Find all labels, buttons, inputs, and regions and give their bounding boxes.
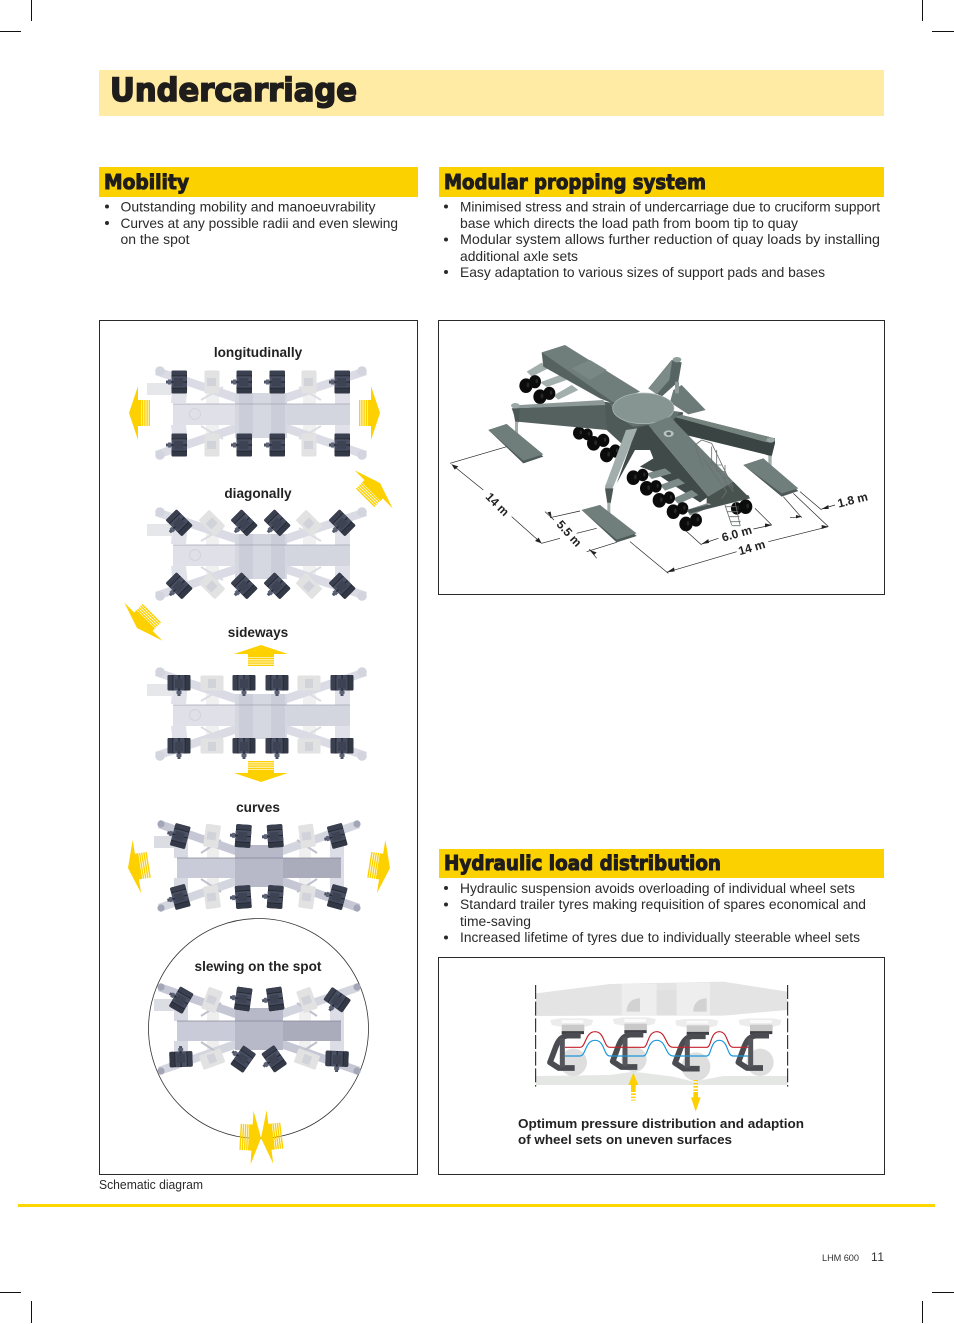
footer: page label: LHM 600 (822, 1253, 859, 1263)
chassis (536, 982, 787, 1016)
arrow: diagonal up right (346, 464, 399, 517)
text block: hydraulic bullets: Increased lifetime of tyres due to individually steerable wheel sets (460, 930, 860, 945)
arrow: diagonal down left (118, 594, 171, 647)
yellow rule (18, 1204, 935, 1207)
title: Undercarriage (110, 71, 357, 109)
text block: mobility bullets: Curves at any possible radii and even slewing (120, 216, 398, 231)
heading: diagonally: diagonally (224, 486, 292, 501)
arrow: slewing left pointing (258, 1109, 285, 1165)
heading: sideways: sideways (228, 625, 288, 640)
arrow: sideways up (234, 645, 288, 666)
diagram: sideways steering (147, 667, 367, 761)
panel: mobility heading (99, 167, 418, 197)
panel: propping system render (438, 320, 884, 594)
ladder (695, 440, 741, 526)
caption: pressure distribution (518, 1116, 804, 1147)
arrow: longitudinal right (359, 386, 380, 440)
front beam (687, 495, 750, 513)
rear right pad (670, 385, 706, 414)
caption: pressure distribution: Optimum pressure distribution and adaption (518, 1116, 804, 1131)
dimension labels: 1.8 m (836, 489, 869, 510)
text block: hydraulic bullets: Hydraulic suspension avoids overloading of individual wheel sets (460, 881, 855, 896)
heading: longitudinally: longitudinally (214, 345, 303, 360)
left arm (512, 404, 607, 430)
arrow: slewing right pointing (239, 1110, 262, 1165)
underside of front beam (611, 425, 708, 502)
suspension units (550, 1017, 782, 1069)
arrow: up (628, 1073, 638, 1101)
dimension labels: 6.0 m (720, 523, 753, 545)
text block: hydraulic bullets (444, 881, 866, 945)
illustration: hydraulic suspension (536, 982, 788, 1112)
text block: hydraulic bullets: time-saving (460, 914, 531, 929)
diagram: slewing steering (154, 983, 361, 1076)
dimension labels: 5.5 m (554, 517, 585, 550)
arrow: down (691, 1080, 701, 1112)
arrow: sideways down (234, 761, 288, 782)
caption: schematic diagram: Schematic diagram (99, 1177, 203, 1192)
wheels (560, 1047, 774, 1081)
footer: page label: 11 (871, 1250, 884, 1264)
slewing plate (610, 403, 680, 427)
diagram: longitudinal steering (147, 366, 367, 460)
footer: page label (822, 1250, 884, 1264)
rear beam (542, 352, 617, 405)
diagram: diagonal steering (147, 507, 367, 603)
text block: modular bullets: base which directs the load path from boom tip to quay (460, 216, 798, 231)
front wheels (627, 469, 752, 531)
dimension labels: 14 m (737, 537, 767, 558)
illustration: undercarriage 3D with dimensions (450, 345, 869, 573)
panel: modular propping heading: Modular propping system (444, 170, 706, 194)
front left arm (605, 428, 637, 487)
text block: modular bullets (444, 200, 880, 280)
rear wheels (519, 375, 621, 462)
text block: hydraulic bullets: Standard trailer tyres making requisition of spares economical and (460, 897, 866, 912)
text block: modular bullets: Minimised stress and strain of undercarriage due to cruciform support (460, 200, 880, 214)
left pad (488, 424, 543, 463)
right arm (673, 415, 775, 457)
right pad (743, 458, 798, 497)
text block: mobility bullets: on the spot (120, 232, 190, 247)
dashed edges (536, 985, 788, 1087)
text block: mobility bullets: Outstanding mobility and manoeuvrability (120, 200, 376, 214)
heading: curves: curves (236, 800, 280, 815)
upper right arm (648, 360, 682, 397)
diagram: curve steering (154, 820, 361, 912)
text block: modular bullets: Easy adaptation to various sizes of support pads and bases (460, 265, 825, 280)
text block: mobility bullets (105, 200, 398, 247)
slewing circle (148, 918, 368, 1138)
text block: modular bullets: additional axle sets (460, 249, 578, 264)
dimension labels (483, 489, 869, 558)
text block: modular bullets: Modular system allows further reduction of quay loads by installing (460, 232, 880, 247)
arrow: curves left (124, 838, 153, 895)
heading: slewing on the spot: slewing on the spot (195, 959, 322, 974)
front axles (647, 468, 712, 516)
dimension lines (450, 447, 835, 573)
dimension arrowheads (452, 464, 829, 572)
central undercarriage body (603, 402, 683, 448)
rear axles (527, 363, 578, 400)
panel: hydraulic heading (439, 849, 884, 878)
panel: pressure distribution (438, 958, 884, 1174)
front pad (582, 505, 637, 542)
hydraulic lines (565, 1032, 748, 1047)
title (99, 70, 884, 116)
dimension labels: 14 m (483, 490, 512, 519)
panel: schematic diagram (100, 320, 418, 1174)
ground (536, 1072, 787, 1085)
panel: mobility heading: Mobility (104, 170, 189, 194)
panel: modular propping heading (439, 167, 884, 197)
arrow: longitudinal left (129, 386, 150, 440)
panel: hydraulic heading: Hydraulic load distribution (444, 851, 721, 875)
arrow: curves right (365, 838, 394, 895)
caption: pressure distribution: of wheel sets on uneven surfaces (518, 1132, 732, 1147)
